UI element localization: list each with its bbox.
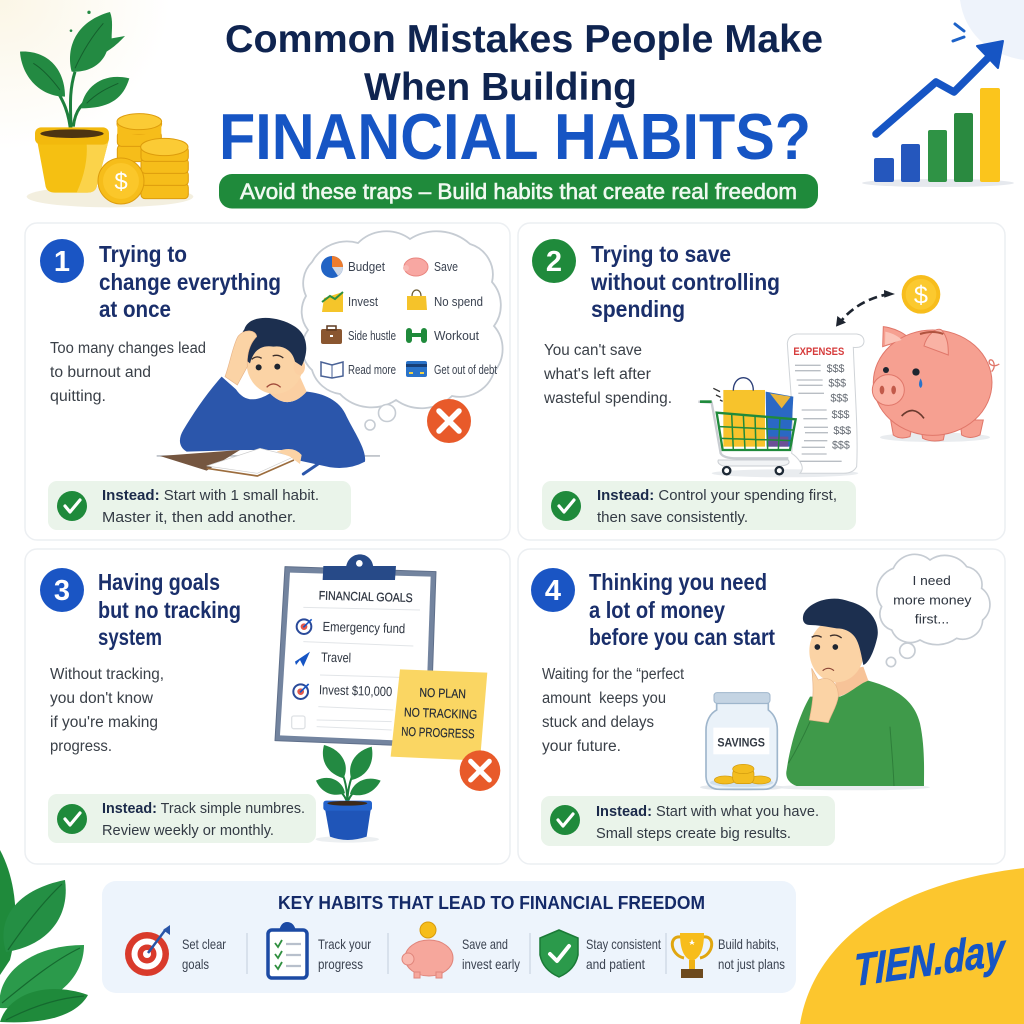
heading 2: Trying to save (591, 241, 731, 267)
habit: save and invest early: invest early (462, 956, 520, 972)
body text 2: You can't save (544, 342, 642, 359)
bubble labels: Save (434, 259, 458, 274)
body text 4: your future. (542, 738, 621, 755)
callout: instead 3 (48, 794, 316, 843)
body text 2: wasteful spending. (543, 390, 672, 407)
thought bubble (877, 554, 990, 667)
badge 2 (532, 239, 576, 283)
habit: set clear goals (125, 925, 226, 976)
body text 4: Waiting for the “perfect (542, 666, 685, 683)
clipboard: Emergency fund (322, 619, 405, 636)
illustration: clipboard, sticky note, plant (275, 554, 500, 843)
heading 2: without controlling (590, 269, 780, 295)
habit: save and invest early (402, 922, 520, 978)
panel: mistake 2 (518, 223, 1005, 540)
heading 3 (98, 569, 241, 650)
subtitle banner: Avoid these traps – Build habits that create real freedom (240, 179, 797, 204)
title: When Building (364, 66, 637, 109)
body text 3: Without tracking, (50, 666, 164, 683)
badge 1 (40, 239, 84, 283)
heading 4 (589, 569, 775, 650)
bubble labels: No spend (434, 294, 483, 309)
callout: instead 4: Instead: Start with what you have. (596, 804, 819, 820)
gold coin: $ (914, 281, 928, 309)
heading 3: system (98, 624, 162, 650)
callout: instead 3: Review weekly or monthly. (102, 823, 274, 839)
bubble labels: Invest (348, 294, 378, 309)
callout: instead 4: Small steps create big results. (596, 826, 791, 842)
panel: mistake 1 (25, 223, 510, 540)
icon: save pig (403, 258, 428, 276)
habit: stay consistent: and patient (586, 956, 645, 972)
bubble labels: Read more (348, 362, 396, 377)
heading 3: but no tracking (98, 597, 241, 623)
habit: track your progress (268, 922, 371, 978)
sad pig (872, 327, 999, 441)
receipt: $$$ (828, 378, 846, 390)
bubble labels: Workout (434, 328, 479, 343)
heading 1: change everything (99, 269, 281, 295)
icon: plant and coins: $ (114, 168, 128, 195)
body text 4: stuck and delays (542, 714, 654, 731)
decorative leaves bottom left (0, 850, 88, 1022)
habit: build habits: not just plans (718, 956, 785, 972)
badge 2: 2 (546, 246, 562, 278)
habit: stay consistent: Stay consistent (586, 936, 661, 952)
body text 3: you don't know (50, 690, 154, 707)
sticky note: NO PLAN (419, 686, 466, 701)
jar (700, 693, 783, 791)
thought bubble: first... (915, 612, 949, 626)
badge 3: 3 (54, 575, 70, 607)
icon: side hustle briefcase (321, 326, 342, 344)
habit: save and invest early: Save and (462, 936, 508, 952)
callout: instead 1: Instead: Start with 1 small habit. (102, 488, 319, 504)
illustration: stressed man at desk (157, 318, 380, 476)
callout: instead 2 (542, 481, 856, 530)
body text 4 (542, 666, 685, 755)
cart (698, 378, 796, 474)
clipboard (275, 554, 436, 747)
bubble labels: Budget (348, 259, 385, 274)
badge 4: 4 (545, 575, 561, 607)
panel: key habits (102, 881, 796, 993)
icon: no spend bag (407, 290, 427, 310)
body text 3: if you're making (50, 714, 158, 731)
habit: stay consistent (540, 930, 661, 977)
title (219, 18, 823, 173)
body text 1: to burnout and (50, 364, 151, 381)
habit: set clear goals: goals (182, 956, 209, 972)
title: Common Mistakes People Make (225, 18, 823, 61)
gold coin (902, 275, 940, 314)
heading 1: Trying to (99, 241, 187, 267)
heading 4: a lot of money (589, 597, 725, 623)
logo: TIEN.day (800, 868, 1024, 1024)
thought bubble: I need (912, 574, 951, 588)
sticky note: NO PROGRESS (401, 725, 475, 741)
receipt: $$$ (832, 440, 850, 452)
bubble labels (348, 259, 497, 377)
body text 1: quitting. (50, 388, 106, 405)
panel: mistake 3 (25, 549, 510, 864)
callout: instead 3: Instead: Track simple numbres. (102, 801, 305, 817)
heading 1: at once (99, 296, 171, 322)
bubble labels: Side hustle (348, 328, 396, 343)
sticky note (391, 669, 487, 761)
body text 3: progress. (50, 738, 112, 755)
habit: build habits: Build habits, (718, 936, 779, 952)
body text 2 (543, 342, 672, 407)
habit: track your progress: Track your (318, 936, 371, 952)
callout: instead 4 (541, 796, 835, 846)
badge 3 (40, 568, 84, 612)
icon: red x (427, 399, 471, 443)
clipboard: Travel (321, 650, 351, 665)
illustration: cart, receipt, sad piggy bank (698, 275, 999, 477)
receipt: $$$ (830, 392, 848, 404)
callout: instead 2: then save consistently. (597, 510, 748, 526)
heading 3: Having goals (98, 569, 220, 595)
icon: budget pie (321, 256, 343, 278)
thought bubble: too many goals (302, 231, 503, 430)
panel: mistake 4 (518, 549, 1005, 864)
dashed arrow (836, 290, 895, 327)
receipt: $$$ (833, 425, 851, 437)
icon: debt card (406, 361, 427, 377)
callout: instead 2: Instead: Control your spending first, (597, 488, 837, 504)
man (786, 599, 924, 786)
heading 1 (99, 241, 281, 322)
body text 1 (50, 340, 206, 405)
sticky note: NO TRACKING (404, 705, 478, 722)
key habits heading: KEY HABITS THAT LEAD TO FINANCIAL FREEDOM (278, 893, 705, 913)
receipt: $$$ (827, 363, 845, 375)
small plant (316, 745, 381, 843)
clipboard: FINANCIAL GOALS (319, 589, 413, 605)
body text 1: Too many changes lead (50, 340, 206, 357)
receipt (787, 334, 864, 473)
body text 2: what's left after (543, 366, 651, 383)
receipt: EXPENSES (793, 346, 845, 358)
body text 4: amount keeps you (542, 690, 666, 707)
callout: instead 1 (48, 481, 351, 530)
receipt: $$$ (832, 409, 850, 421)
callout: instead 1: Master it, then add another. (102, 510, 296, 526)
heading 2 (590, 241, 780, 322)
badge 4 (531, 568, 575, 612)
heading 4: Thinking you need (589, 569, 767, 595)
title: FINANCIAL HABITS? (219, 100, 811, 173)
bubble labels: Get out of debt (434, 362, 497, 377)
illustration: man thinking with savings jar (700, 554, 990, 791)
clipboard: Invest $10,000 (319, 682, 392, 699)
habit: build habits (672, 933, 785, 978)
jar: SAVINGS (717, 736, 765, 750)
badge 1: 1 (54, 246, 70, 278)
thought bubble: more money (893, 593, 972, 607)
habit: track your progress: progress (318, 956, 363, 972)
chart: rising bars and arrow (862, 24, 1014, 187)
icon: workout (406, 328, 427, 343)
icon: plant and coins (20, 11, 193, 207)
body text 3 (50, 666, 164, 755)
habit: set clear goals: Set clear (182, 936, 226, 952)
subtitle banner (219, 174, 818, 208)
icon: invest (322, 292, 343, 312)
red x (460, 750, 500, 791)
heading 2: spending (591, 296, 685, 322)
heading 4: before you can start (589, 624, 775, 650)
icon: read more book (321, 362, 343, 378)
